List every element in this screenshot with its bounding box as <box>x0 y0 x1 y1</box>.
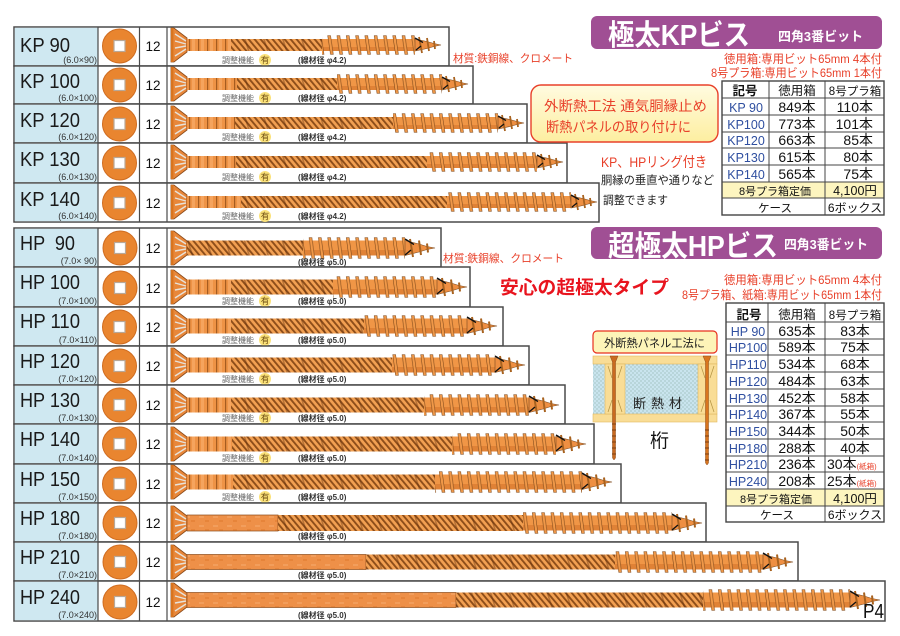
icon: washer <box>102 186 136 220</box>
row: HP 240: (7.0×240) <box>58 610 97 620</box>
row: HP 120: HP 120 <box>20 350 80 373</box>
row: HP 140 <box>14 424 594 464</box>
row: HP 180: (線材径 φ5.0) <box>298 531 347 541</box>
table: HP quantities: 6ボックス <box>828 508 882 522</box>
ring note: KP、HPリング付き <box>601 154 707 170</box>
screw KP 120 <box>171 106 524 140</box>
screw HP 130 <box>171 388 559 422</box>
row: HP 180: (7.0×180) <box>58 531 97 541</box>
row: KP 120: (6.0×120) <box>58 132 97 142</box>
table: HP quantities: 58本 <box>840 390 870 406</box>
row: HP 120: 12 <box>145 359 161 374</box>
row: HP 130 <box>14 385 565 424</box>
table: HP quantities <box>726 303 884 522</box>
icon: washer <box>102 29 136 63</box>
row: HP 140: HP 140 <box>20 428 80 451</box>
row: HP 100 <box>14 267 470 307</box>
row: HP 210: 12 <box>145 555 161 570</box>
row: KP 90: (線材径 φ4.2) <box>298 55 347 65</box>
row: KP 130 <box>14 143 567 183</box>
table: HP quantities: 452本 <box>778 390 816 406</box>
table: HP quantities: 63本 <box>840 373 870 389</box>
row: HP 210: (線材径 φ5.0) <box>298 570 347 580</box>
row: KP 90: (6.0×90) <box>63 55 97 65</box>
row: HP 110: (7.0×110) <box>59 335 97 345</box>
ring note: 胴縁の垂直や通りなど <box>601 173 714 187</box>
table: KP quantities: 80本 <box>843 149 873 165</box>
accessory notes HP: 8号プラ箱、紙箱:専用ビット65mm 1本付 <box>682 287 882 302</box>
screw HP 120 <box>171 348 525 382</box>
row: KP 140 <box>14 183 599 222</box>
row: HP 110: HP 110 <box>20 310 80 333</box>
screw HP 150 <box>171 465 612 499</box>
heading: KP <box>591 16 882 52</box>
table: HP quantities: HP110 <box>729 358 767 372</box>
callout: insulation use: 外断熱工法 通気胴縁止め <box>544 98 707 114</box>
icon: washer <box>102 68 136 102</box>
row: HP 130: (線材径 φ5.0) <box>298 413 347 423</box>
heading: KP: 四角3番ビット <box>778 29 863 44</box>
row: HP 90 <box>14 228 441 267</box>
row: HP 150 <box>14 464 621 503</box>
table: HP quantities: 589本 <box>778 339 816 355</box>
table: HP quantities: HP240 <box>729 475 767 489</box>
row: HP 240: 12 <box>145 595 161 610</box>
panel: HP screw list <box>14 228 885 621</box>
row: KP 130: 12 <box>145 156 161 171</box>
callout: insulation use <box>531 85 718 142</box>
row: KP 120 <box>14 104 527 143</box>
table: HP quantities: 30本(紙箱) <box>827 456 877 472</box>
row: HP 90: (線材径 φ5.0) <box>298 257 347 267</box>
row: HP 120: (7.0×120) <box>58 374 97 384</box>
row: HP 210: (7.0×210) <box>58 570 97 580</box>
row: HP 100: (線材径 φ5.0) <box>298 296 347 306</box>
table: KP quantities: 849本 <box>778 99 816 115</box>
screw HP 110 <box>171 309 497 343</box>
material note HP: 材質:鉄銅線、クロメート <box>443 251 564 265</box>
icon: washer <box>102 349 136 383</box>
row: HP 100: (7.0×100) <box>58 296 97 306</box>
icon: washer <box>103 231 137 265</box>
row: HP 100: HP 100 <box>20 271 80 294</box>
ring note: 調整できます <box>603 193 668 207</box>
table: KP quantities: KP140 <box>727 168 765 182</box>
icon: washer <box>103 506 137 540</box>
table: HP quantities: HP180 <box>729 442 767 456</box>
table: HP quantities: 484本 <box>778 373 816 389</box>
table: KP quantities: 75本 <box>843 166 873 182</box>
row: HP 180 <box>14 503 706 542</box>
row: KP 120: 12 <box>145 117 161 132</box>
table: HP quantities: 236本 <box>778 456 816 472</box>
screw in panel right <box>703 356 711 465</box>
accessory notes KP: 8号プラ箱:専用ビット65mm 1本付 <box>711 65 882 80</box>
icon: washer <box>102 388 136 422</box>
row: KP 90 <box>14 27 449 66</box>
row: HP 180: HP 180 <box>20 507 80 530</box>
insulation label: 断 熱 材 <box>633 396 682 411</box>
table: HP quantities: 4,100円 <box>833 492 877 506</box>
icon: washer <box>102 467 136 501</box>
table: HP quantities: 55本 <box>840 406 870 422</box>
table: KP quantities: KP 90 <box>729 101 763 115</box>
table: HP quantities: HP140 <box>729 408 767 422</box>
table: HP quantities: 534本 <box>778 356 816 372</box>
diagram label: 外断熱パネル工法に <box>604 337 705 350</box>
row: HP 140: (7.0×140) <box>58 453 97 463</box>
row: KP 120: KP 120 <box>20 109 80 132</box>
row: HP 240 <box>14 581 885 621</box>
accessory notes KP: 徳用箱:専用ビット65mm 4本付 <box>724 51 882 66</box>
row: KP 130: KP 130 <box>20 148 80 171</box>
table: HP quantities: HP 90 <box>731 325 765 339</box>
diagram: external insulation panel <box>593 331 717 465</box>
table: HP quantities: HP130 <box>729 392 767 406</box>
row: KP 100: 12 <box>145 78 161 93</box>
screw KP 130 <box>171 145 563 179</box>
table: HP quantities: 8号プラ箱 <box>829 308 881 322</box>
row: HP 120 <box>14 346 529 385</box>
row: KP 90: KP 90 <box>20 34 70 57</box>
table: KP quantities: KP100 <box>727 118 765 132</box>
icon: washer <box>102 427 136 461</box>
screw HP 180 <box>171 506 702 540</box>
heading: HP: 四角3番ビット <box>784 237 868 252</box>
row: HP 110: (線材径 φ5.0) <box>298 335 347 345</box>
table: KP quantities: 110本 <box>837 99 873 115</box>
row: KP 100: (線材径 φ4.2) <box>298 93 347 103</box>
row: KP 100: KP 100 <box>20 70 80 93</box>
table: KP quantities: 101本 <box>836 116 873 132</box>
row: KP 130: (6.0×130) <box>58 172 97 182</box>
table: HP quantities: 記号 <box>736 308 762 322</box>
row: HP 180: 12 <box>145 516 161 531</box>
row: HP 210: HP 210 <box>20 546 80 569</box>
heading: HP: 超極太HPビス <box>608 230 778 263</box>
heading: HP <box>591 227 882 263</box>
wood frame <box>593 356 717 422</box>
screw KP 90 <box>171 28 441 62</box>
table: HP quantities: 83本 <box>840 323 870 339</box>
table: HP quantities: HP210 <box>729 458 767 472</box>
table: HP quantities: 635本 <box>778 323 816 339</box>
row: HP 150: (線材径 φ5.0) <box>298 492 347 502</box>
row: HP 150: HP 150 <box>20 468 80 491</box>
page number: P4 <box>863 601 884 623</box>
table: HP quantities: 68本 <box>840 356 870 372</box>
accessory notes HP <box>682 272 882 302</box>
table: HP quantities: HP100 <box>729 341 767 355</box>
screw KP 100 <box>171 67 468 101</box>
screw HP 100 <box>171 270 467 304</box>
panel: KP screw list <box>14 27 599 222</box>
table: HP quantities: 208本 <box>778 473 816 489</box>
table: KP quantities: 663本 <box>778 132 816 148</box>
table: KP quantities: KP120 <box>727 134 765 148</box>
table: KP quantities: 徳用箱 <box>778 83 816 98</box>
icon: washer <box>103 585 137 619</box>
table: KP quantities: 8号プラ箱 <box>829 84 881 98</box>
table: HP quantities: 徳用箱 <box>778 307 816 322</box>
row: HP 100: 12 <box>145 281 161 296</box>
table: HP quantities: 288本 <box>778 440 816 456</box>
table: HP quantities: ケース <box>760 509 794 522</box>
slogan: 安心の超極太タイプ <box>500 277 669 298</box>
table: HP quantities: 75本 <box>840 339 870 355</box>
screw HP 140 <box>171 427 586 461</box>
table: HP quantities: 344本 <box>778 423 816 439</box>
table: KP quantities: KP130 <box>727 151 765 165</box>
row: KP 140: KP 140 <box>20 188 80 211</box>
row: HP 130: (7.0×130) <box>58 413 97 423</box>
icon: washer <box>102 146 136 180</box>
table: HP quantities: HP120 <box>729 375 767 389</box>
table: KP quantities: 記号 <box>732 84 758 98</box>
table: KP quantities: 85本 <box>843 132 873 148</box>
row: HP 90: 12 <box>145 241 161 256</box>
row: HP 240: HP 240 <box>20 586 80 609</box>
table: HP quantities: 25本(紙箱) <box>827 473 877 489</box>
table: KP quantities: 773本 <box>778 116 816 132</box>
row: HP 110 <box>14 307 503 346</box>
row: HP 140: 12 <box>145 437 161 452</box>
material note KP: 材質:鉄銅線、クロメート <box>453 51 573 65</box>
row: KP 140: 12 <box>145 196 161 211</box>
table: HP quantities: 50本 <box>840 423 870 439</box>
icon: washer <box>103 545 137 579</box>
screw HP 90 <box>171 231 435 265</box>
row: HP 130: HP 130 <box>20 389 80 412</box>
accessory notes KP <box>711 51 882 80</box>
row: HP 150: 12 <box>145 477 161 492</box>
screw HP 240 <box>171 583 880 617</box>
table: HP quantities: 8号プラ箱定価 <box>740 492 812 506</box>
ring note <box>601 154 714 207</box>
table: KP quantities: 615本 <box>778 149 816 165</box>
row: KP 140: (6.0×140) <box>58 211 97 221</box>
row: KP 90: 12 <box>145 39 161 54</box>
row: KP 140: (線材径 φ4.2) <box>298 211 347 221</box>
icon: washer <box>103 271 137 305</box>
icon: washer <box>102 310 136 344</box>
table: KP quantities <box>722 81 884 215</box>
heading: KP: 極太KPビス <box>608 19 750 52</box>
accessory notes HP: 徳用箱:専用ビット65mm 4本付 <box>724 272 882 287</box>
row: HP 150: (7.0×150) <box>58 492 97 502</box>
table: HP quantities: HP150 <box>729 425 767 439</box>
icon: washer <box>102 107 136 141</box>
row: HP 130: 12 <box>145 398 161 413</box>
insulation layer <box>593 364 717 414</box>
table: KP quantities: 4,100円 <box>833 184 877 198</box>
screw KP 140 <box>171 185 597 219</box>
row: HP 120: (線材径 φ5.0) <box>298 374 347 384</box>
callout: insulation use: 断熱パネルの取り付けに <box>546 119 691 135</box>
row: HP 90: (7.0× 90) <box>61 256 97 266</box>
beam label: 桁 <box>650 430 669 452</box>
row: HP 240: (線材径 φ5.0) <box>298 610 347 620</box>
table: KP quantities: 6ボックス <box>828 201 882 215</box>
row: HP 210 <box>14 542 798 581</box>
row: KP 130: (線材径 φ4.2) <box>298 172 347 182</box>
screw HP 210 <box>171 545 793 579</box>
table: HP quantities: 367本 <box>778 406 816 422</box>
row: KP 100 <box>14 66 473 104</box>
table: KP quantities: 8号プラ箱定価 <box>739 184 811 198</box>
row: KP 100: (6.0×100) <box>58 93 97 103</box>
row: HP 90: HP 90 <box>20 232 75 255</box>
row: KP 120: (線材径 φ4.2) <box>298 132 347 142</box>
table: KP quantities: 565本 <box>778 166 816 182</box>
screw in panel left <box>610 356 618 460</box>
table: HP quantities: 40本 <box>840 440 870 456</box>
row: HP 140: (線材径 φ5.0) <box>298 453 347 463</box>
row: HP 110: 12 <box>145 320 161 335</box>
table: KP quantities: ケース <box>758 202 792 215</box>
